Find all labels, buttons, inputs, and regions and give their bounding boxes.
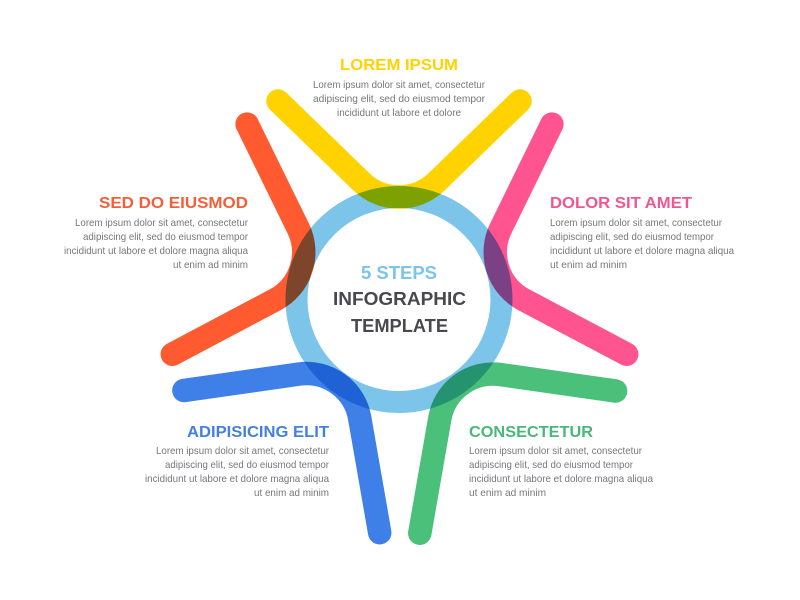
text block: Adipisicing elit: Lorem ipsum dolor sit amet, consectetur [156, 446, 330, 457]
arm: green step 3 [363, 313, 616, 533]
text block: Sed do eiusmod [64, 195, 249, 271]
text block: Lorem Ipsum: incididunt ut labore et dolore [337, 108, 461, 119]
text block: Consectetur: ut enim ad minim [469, 488, 546, 499]
text block: Sed do eiusmod: Lorem ipsum dolor sit amet, consectetur [75, 218, 249, 229]
center heading: infographic template: INFOGRAPHIC [333, 288, 466, 309]
text block: Consectetur: incididunt ut labore et dolore magna aliqua [469, 474, 653, 485]
center heading: infographic template [333, 288, 466, 336]
text block: Dolor sit amet: DOLOR SIT AMET [550, 195, 693, 212]
center title [333, 262, 466, 336]
center heading: 5 steps: 5 STEPS [361, 262, 437, 283]
text block: Adipisicing elit: ADIPISICING ELIT [187, 424, 330, 441]
text block: Sed do eiusmod: incididunt ut labore et dolore magna aliqua [64, 246, 248, 257]
text block: Lorem Ipsum: Lorem ipsum dolor sit amet, consectetur [313, 80, 486, 91]
text block: Adipisicing elit: adipiscing elit, sed do eiusmod tempor [165, 460, 330, 471]
text block: Dolor sit amet: Lorem ipsum dolor sit amet, consectetur [550, 218, 723, 229]
text block: Consectetur: adipiscing elit, sed do eiusmod tempor [469, 460, 634, 471]
text block: Adipisicing elit: ut enim ad minim [254, 488, 329, 499]
arm: blue step 4 [184, 313, 436, 533]
text block: Lorem Ipsum [313, 57, 486, 119]
arm: pink step 2 [461, 124, 627, 384]
text block: Dolor sit amet: adipiscing elit, sed do eiusmod tempor [550, 232, 715, 243]
text block: Consectetur [469, 424, 653, 499]
text block: Consectetur: Lorem ipsum dolor sit amet, consectetur [469, 446, 643, 457]
text block: Sed do eiusmod: SED DO EIUSMOD [99, 195, 248, 212]
text block: Adipisicing elit: incididunt ut labore et dolore magna aliqua [145, 474, 329, 485]
text block: Lorem Ipsum: LOREM IPSUM [340, 57, 458, 74]
text block: Adipisicing elit [145, 424, 330, 499]
arm: orange step 5 [172, 124, 338, 384]
text block: Sed do eiusmod: ut enim ad minim [173, 260, 248, 271]
text block: Dolor sit amet: incididunt ut labore et dolore magna aliqua [550, 246, 734, 257]
arm: yellow step 1 [278, 101, 520, 197]
text block: Sed do eiusmod: adipiscing elit, sed do eiusmod tempor [83, 232, 249, 243]
center heading: infographic template: TEMPLATE [351, 315, 448, 336]
text block: Dolor sit amet: ut enim ad minim [550, 260, 627, 271]
text block: Lorem Ipsum: adipiscing elit, sed do eiusmod tempor [313, 94, 486, 105]
text block: Dolor sit amet [550, 195, 734, 271]
central ring [296, 197, 502, 402]
text block: Consectetur: CONSECTETUR [469, 424, 593, 441]
